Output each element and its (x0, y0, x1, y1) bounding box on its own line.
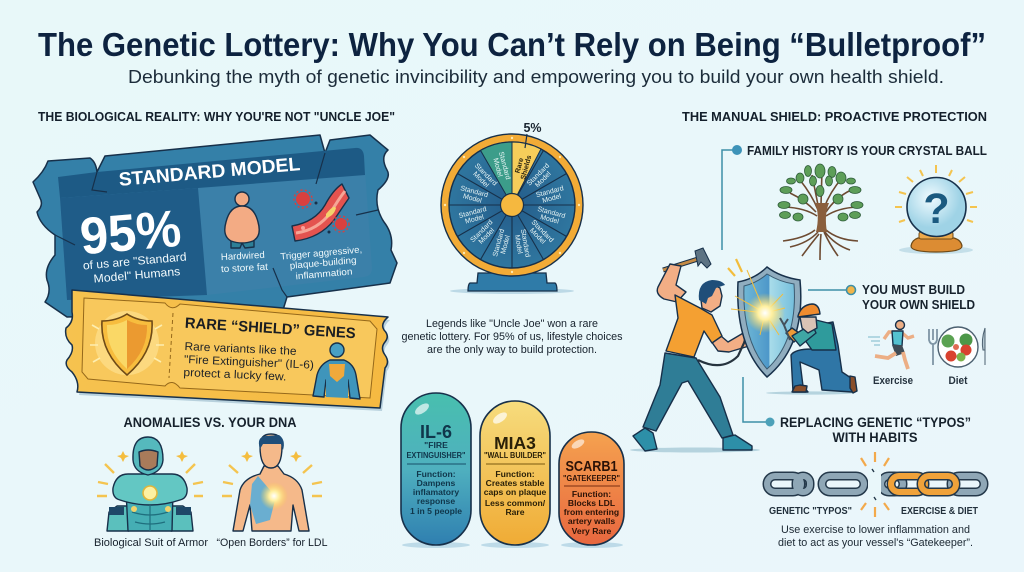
heading: family history: FAMILY HISTORY IS YOUR CRYSTAL BALL (747, 144, 987, 158)
shoes (633, 428, 752, 451)
ticket heading: STANDARD MODEL (118, 154, 301, 191)
trousers (643, 353, 733, 438)
capsule: IL-6: "FIRE (424, 440, 448, 450)
wheel labels: Model (500, 234, 512, 255)
capsule: SCARB1: "GATEKEEPER" (563, 473, 620, 483)
icon: armor suit (97, 437, 203, 531)
icon: crystal ball (895, 165, 977, 254)
capsule: SCARB1: Blocks LDL (568, 498, 615, 508)
wheel labels: Model (542, 193, 562, 205)
heading: replacing typos: WITH HABITS (832, 430, 918, 445)
wheel labels: Model (513, 234, 523, 255)
caption: inflammation: inflammation (295, 266, 353, 281)
heading: replacing typos (780, 415, 971, 445)
heading: biological reality: THE BIOLOGICAL REALITY: WHY YOU'RE NOT "UNCLE JOE" (38, 109, 395, 124)
closing advice text: Use exercise to lower inflammation and (781, 524, 970, 536)
wheel labels: Model (464, 214, 485, 226)
shirt (666, 295, 722, 357)
wheel labels: Standard (459, 185, 489, 199)
capsule: MIA3: Function: (495, 469, 535, 479)
capsule: IL-6 (401, 393, 471, 548)
capsule: MIA3: Creates stable (486, 478, 545, 488)
wheel 5% label: 5% (523, 121, 542, 135)
icon: open borders body (222, 434, 322, 531)
caption: exercise: Exercise (873, 375, 913, 387)
heading: anomalies: ANOMALIES VS. YOUR DNA (124, 414, 296, 430)
capsule: SCARB1: SCARB1 (566, 458, 618, 475)
caption: inflammation (280, 244, 364, 283)
big number caption: Model" Humans (93, 265, 181, 286)
wheel labels (458, 151, 566, 259)
capsule: SCARB1: artery walls (568, 516, 615, 526)
wheel labels: Standard (537, 206, 566, 220)
icon: plate with fork and knife (929, 327, 985, 367)
head (701, 284, 722, 312)
wheel hub (500, 194, 524, 216)
heading: build your own shield: YOUR OWN SHIELD (862, 298, 975, 312)
connector: build shield (808, 286, 856, 294)
heading: manual shield: THE MANUAL SHIELD: PROACTIVE PROTECTION (682, 109, 987, 124)
capsule: SCARB1: Very Rare (572, 526, 612, 536)
capsule: SCARB1: from entering (564, 507, 619, 517)
caption: armor: Biological Suit of Armor (94, 537, 208, 549)
capsule: MIA3: Rare (505, 507, 525, 517)
chain label: typos: GENETIC "TYPOS" (769, 506, 852, 517)
wheel labels: Standard (469, 219, 495, 244)
lottery explanation text (402, 318, 623, 356)
welding torch (698, 316, 762, 365)
closing advice text: diet to act as your vessel's “Gatekeeper”. (778, 537, 973, 549)
wheel labels: Standard (519, 229, 531, 258)
capsule: IL-6: response (417, 496, 455, 506)
wheel labels: Standard (535, 185, 565, 199)
ticket body (183, 341, 315, 385)
wheel labels: Model (534, 170, 553, 189)
lottery explanation text: Legends like "Uncle Joe" won a rare (426, 318, 598, 330)
subtitle: Debunking the myth of genetic invincibility and empowering you to build your own health shield. (128, 67, 944, 87)
caption: diet: Diet (948, 375, 968, 387)
ticket heading: RARE “SHIELD” GENES (184, 315, 356, 342)
illustration: man hammering shield (630, 248, 762, 452)
wheel segment: 5% rare shields (512, 142, 541, 205)
wheel labels: Standard (492, 228, 506, 258)
forearm (711, 332, 751, 352)
wheel labels: Standard (497, 151, 511, 180)
chart: lottery wheel (441, 121, 583, 294)
ticket body: protect a lucky few. (183, 367, 287, 383)
caption: store fat (220, 250, 269, 275)
capsule: IL-6: 1 in 5 people (410, 506, 462, 516)
panel: standard model ticket (33, 135, 397, 317)
capsule: MIA3: Less common/ (485, 498, 546, 508)
capsule: IL-6: inflamatory (413, 487, 459, 497)
capsule: MIA3: MIA3 (494, 433, 536, 453)
capsule: SCARB1: Function: (572, 489, 611, 499)
big number caption (82, 251, 188, 286)
icon: metal shield (738, 267, 801, 377)
capsule: MIA3: caps on plaque (484, 487, 546, 497)
icon: crystal ball: ? (923, 185, 950, 233)
chain label: exercise and diet: EXERCISE & DIET (901, 506, 979, 517)
caption: inflammation: plaque-building (289, 255, 357, 271)
closing advice text (778, 524, 973, 549)
wheel labels: Standard (530, 219, 555, 244)
caption: store fat: Hardwired (221, 250, 265, 263)
connector: family history (722, 145, 742, 250)
wheel segment: green standard model (480, 142, 512, 205)
lottery explanation text: genetic lottery. For 95% of us, lifestyle choices (402, 331, 623, 343)
wheel labels: Model (462, 193, 483, 205)
wheel labels: Standard (526, 162, 551, 187)
panel: rare shield genes ticket (66, 290, 390, 411)
capsule: IL-6: EXTINGUISHER" (406, 450, 466, 460)
capsule: SCARB1 (559, 432, 624, 548)
capsule: IL-6: IL-6 (420, 422, 452, 442)
hammer (663, 248, 711, 270)
lottery explanation text: are the only way to build protection. (427, 344, 597, 356)
connector: replacing typos (743, 377, 774, 426)
wheel labels: Model (471, 171, 490, 189)
wheel labels: Model (491, 157, 503, 178)
caption: open borders: “Open Borders” for LDL (216, 537, 328, 549)
wheel labels: Rare (515, 157, 525, 174)
icon: overweight person (225, 192, 259, 248)
wheel labels: Standard (458, 206, 487, 220)
capsule: IL-6: Dampens (417, 478, 456, 488)
icon: broken chain (767, 452, 984, 517)
icon: runner (868, 320, 914, 369)
wheel labels: Model (528, 227, 547, 246)
illustration: kneeling worker (766, 304, 857, 395)
icon: shielded figure (313, 343, 360, 399)
capsule: MIA3: "WALL BUILDER" (484, 450, 546, 460)
icon: golden shield (90, 311, 164, 375)
icon: inflamed artery (292, 184, 349, 241)
wheel labels: Standard (473, 162, 498, 188)
title: The Genetic Lottery: Why You Can’t Rely on Being “Bulletproof” (38, 26, 986, 63)
ticket body: "Fire Extinguisher" (IL-6) (184, 354, 314, 372)
heading: build your own shield: YOU MUST BUILD (862, 283, 965, 297)
ticket body: Rare variants like the (184, 341, 297, 358)
arm raised (657, 264, 686, 302)
icon: family tree (778, 164, 863, 260)
wheel stand (468, 273, 557, 291)
heading: build your own shield (862, 283, 975, 312)
wheel labels: Model (478, 227, 496, 246)
big number caption: of us are "Standard (82, 251, 187, 273)
capsule: MIA3 (480, 401, 550, 548)
big number: 95% (78, 200, 183, 266)
wheel labels: Model (539, 214, 560, 226)
wheel labels: Shields (520, 155, 533, 180)
caption: store fat: to store fat (221, 262, 269, 275)
icon: weld spark (728, 259, 785, 335)
heading: replacing typos: REPLACING GENETIC “TYPOS” (780, 415, 971, 430)
caption: inflammation: Trigger aggressive, (280, 244, 362, 262)
capsule: IL-6: Function: (416, 469, 456, 479)
